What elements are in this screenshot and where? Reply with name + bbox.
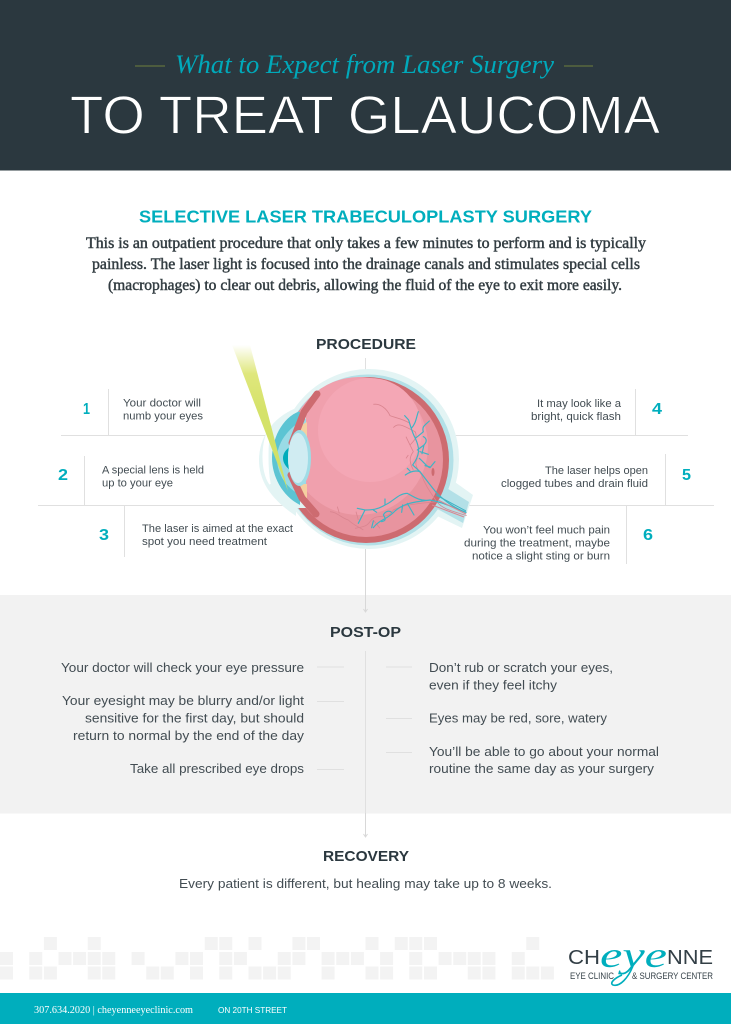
pupil: [283, 446, 291, 471]
title: TO TREAT GLAUCOMA: [70, 86, 660, 146]
blood vessels: [330, 404, 467, 530]
arrows between sections: [364, 549, 368, 837]
post-op right column: Don’t rub or scratch your eyes,: [429, 660, 613, 675]
contact details: 307.634.2020 | cheyenneeyeclinic.com: [34, 1005, 193, 1016]
step 4: bright, quick flash: [531, 411, 621, 423]
cornea: [272, 411, 307, 505]
post-op left column: sensitive for the first day, but should: [85, 710, 304, 726]
intro paragraph: (macrophages) to clear out debris, allowing the fluid of the eye to exit more easily.: [108, 277, 622, 294]
step 3: spot you need treatment: [142, 536, 267, 548]
step 6: 6: [643, 527, 653, 544]
section heading: SELECTIVE LASER TRABECULOPLASTY SURGERY: [139, 206, 592, 226]
post-op left column: Your eyesight may be blurry and/or light: [62, 693, 304, 708]
intro paragraph: This is an outpatient procedure that only takes a few minutes to perform and is typically: [86, 235, 646, 252]
step 5: 5: [682, 467, 691, 484]
clinic logo: eye: [600, 935, 667, 975]
clinic logo: & SURGERY CENTER: [632, 971, 713, 981]
post-op right column: Eyes may be red, sore, watery: [429, 710, 607, 726]
clinic logo: [568, 935, 713, 985]
footer bar: [0, 993, 731, 1024]
step 5: clogged tubes and drain fluid: [501, 478, 648, 490]
step 3: The laser is aimed at the exact: [142, 523, 293, 535]
post-op right column: routine the same day as your surgery: [429, 761, 655, 776]
subtitle: What to Expect from Laser Surgery: [175, 50, 554, 79]
header banner: [0, 0, 731, 170]
eyeball wall: [283, 377, 449, 543]
step 5: The laser helps open: [545, 465, 648, 477]
intro paragraph: painless. The laser light is focused into the drainage canals and stimulates special cells: [92, 256, 640, 273]
iris and ciliary body: [291, 394, 317, 514]
recovery heading: RECOVERY: [323, 848, 409, 865]
post-op right column: even if they feel itchy: [429, 678, 558, 692]
clinic logo: NNE: [667, 947, 713, 969]
post-op heading: POST-OP: [330, 624, 401, 641]
post-op right column: [429, 660, 659, 776]
optic nerve vessels: [432, 495, 466, 517]
procedure connector lines: [38, 358, 714, 564]
step 4: [531, 398, 662, 423]
step 6: notice a slight sting or burn: [472, 550, 610, 562]
lens: [288, 430, 311, 486]
post-op left column: Your doctor will check your eye pressure: [61, 660, 304, 675]
intro paragraph: [86, 235, 646, 294]
step 2: up to your eye: [102, 478, 173, 490]
post-op left column: Take all prescribed eye drops: [130, 761, 305, 776]
step 1: Your doctor will: [123, 398, 201, 410]
recovery text: Every patient is different, but healing may take up to 8 weeks.: [179, 876, 552, 891]
fundus spot: [432, 468, 434, 476]
step 4: 4: [652, 401, 662, 418]
post-op connector lines: [317, 651, 412, 813]
post-op panel: [0, 595, 731, 814]
clinic logo: CH: [568, 947, 600, 969]
eye anatomy illustration: [259, 369, 473, 549]
step 2: A special lens is held: [102, 464, 204, 476]
step 6: [464, 524, 653, 562]
step 3: 3: [99, 527, 109, 544]
step 6: You won’t feel much pain: [483, 524, 610, 536]
step 2: 2: [58, 467, 68, 484]
step 1: 1: [83, 401, 90, 418]
clinic logo: EYE CLINIC: [570, 971, 614, 981]
step 1: [83, 398, 204, 422]
post-op right column: You’ll be able to go about your normal: [429, 744, 659, 759]
eye outer halo: [259, 369, 473, 549]
retina: [289, 377, 443, 537]
procedure heading: PROCEDURE: [316, 336, 416, 353]
step 5: [501, 465, 691, 490]
step 1: numb your eyes: [123, 410, 204, 422]
location: ON 20TH STREET: [218, 1005, 287, 1015]
step 6: during the treatment, maybe: [464, 538, 610, 550]
laser beam: [232, 345, 288, 491]
decorative pixel pattern: [0, 937, 554, 980]
optic nerve: [282, 374, 469, 546]
step 4: It may look like a: [537, 398, 622, 410]
step 3: [99, 523, 293, 548]
post-op left column: [61, 660, 305, 776]
post-op left column: return to normal by the end of the day: [73, 728, 305, 743]
step 2: [58, 464, 204, 490]
